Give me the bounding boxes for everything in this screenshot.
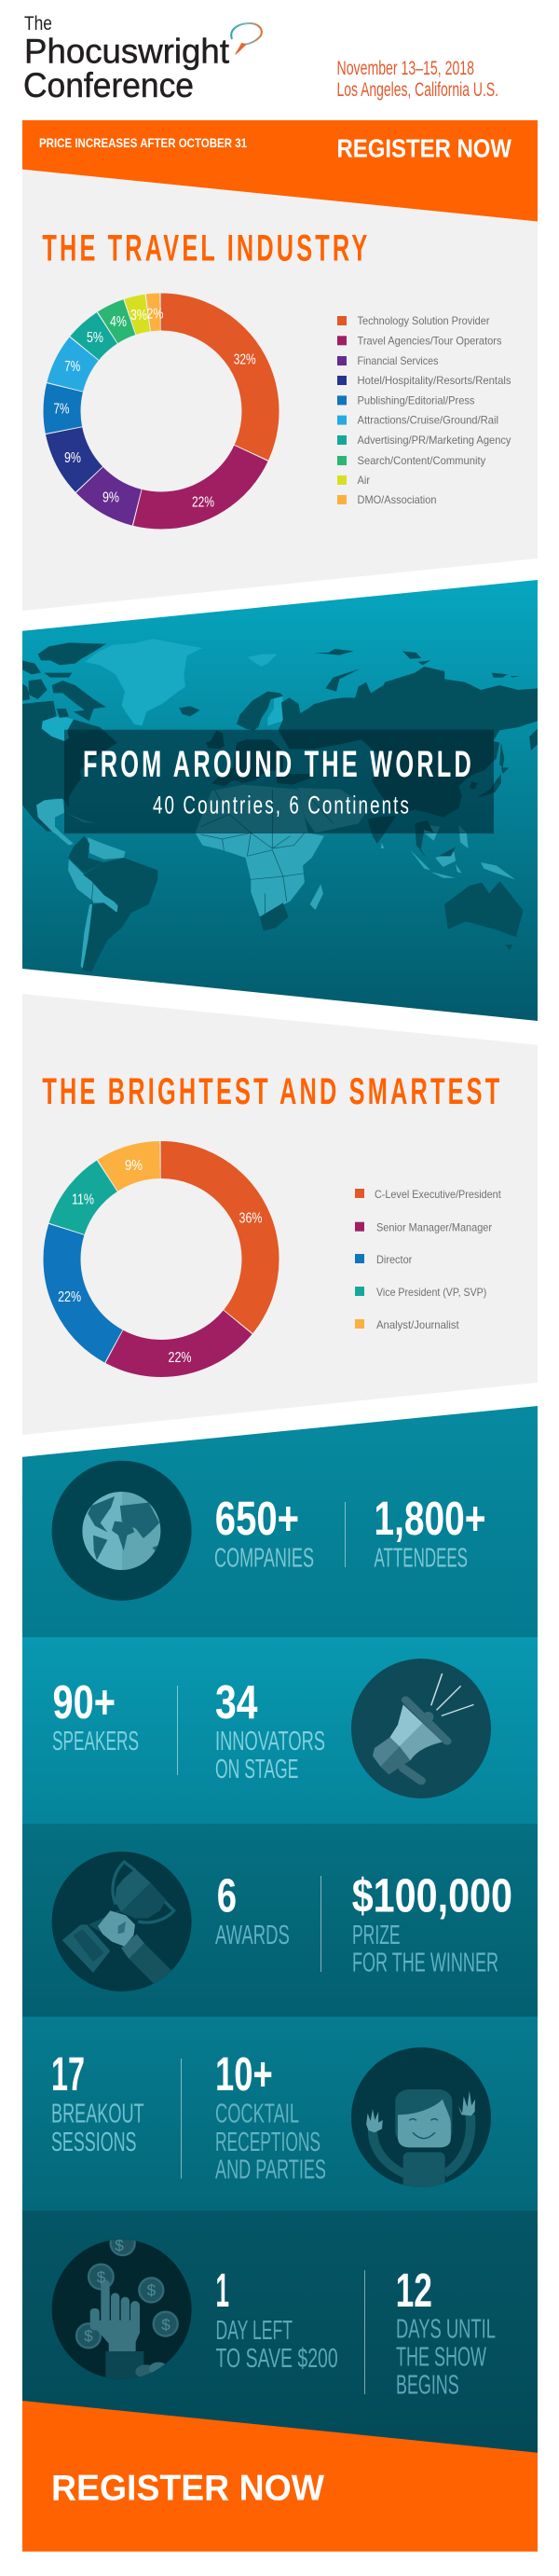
- event date and location: [337, 58, 498, 101]
- stat: 10+ cocktail receptions: RECEPTIONS: [215, 2128, 320, 2157]
- stat: $100,000 prize: $100,000: [352, 1869, 512, 1922]
- legend: travel industry: Technology Solution Provider: [358, 314, 490, 327]
- stat: 1 day left: 1: [216, 2264, 229, 2317]
- donut percentage labels: 11%: [72, 1192, 94, 1208]
- donut percentage labels: [54, 306, 256, 511]
- icon: hand and coins: $: [147, 2281, 157, 2299]
- logo: The Phocuswright Conference: Conference: [23, 66, 194, 104]
- chart: job level donut: [61, 1160, 261, 1358]
- stat: 1,800+ attendees: [375, 1492, 486, 1574]
- icon: hand and coins: $: [84, 2327, 93, 2345]
- legend: travel industry: Travel Agencies/Tour Operators: [358, 334, 501, 347]
- donut percentage labels: 5%: [87, 330, 103, 346]
- donut percentage labels: [58, 1158, 262, 1366]
- donut percentage labels: 22%: [168, 1350, 192, 1366]
- icon: trophy in hand: [52, 1852, 192, 1991]
- legend: travel industry: Hotel/Hospitality/Resorts/Rentals: [358, 374, 511, 387]
- legend: job level: Director: [376, 1253, 412, 1266]
- legend: travel industry: Financial Services: [358, 354, 438, 367]
- stat row: days left: [22, 2211, 538, 2455]
- panel: brightest and smartest: [22, 994, 538, 1435]
- stat row: awards and prize: [22, 1824, 538, 2017]
- subheading: countries and continents: 40 Countries, 6 Continents: [153, 792, 411, 820]
- footer banner: register now: [22, 2401, 538, 2552]
- world map: [22, 639, 538, 972]
- stat: 90+ speakers: 90+: [52, 1675, 116, 1729]
- legend: job level: Analyst/Journalist: [376, 1318, 459, 1331]
- legend: travel industry: Advertising/PR/Marketing Agency: [358, 434, 511, 447]
- title overlay box: [64, 730, 494, 833]
- stat row: companies and attendees: [22, 1406, 538, 1637]
- donut percentage labels: 9%: [102, 490, 119, 505]
- logo: The Phocuswright Conference: Phocuswright: [24, 32, 230, 70]
- stat: 12 days until the show: DAYS UNTIL: [396, 2314, 496, 2344]
- panel: travel industry: [22, 168, 538, 611]
- stat: 17 breakout sessions: SESSIONS: [51, 2128, 136, 2157]
- donut percentage labels: 32%: [234, 352, 256, 367]
- footer banner: register now: REGISTER NOW: [51, 2469, 324, 2509]
- legend: travel industry: Search/Content/Community: [358, 454, 485, 467]
- stat: 90+ speakers: SPEAKERS: [52, 1727, 139, 1756]
- logo: The Phocuswright Conference: [23, 12, 262, 104]
- top banner: register now: PRICE INCREASES AFTER OCTOBER 31: [39, 135, 247, 150]
- donut percentage labels: 3%: [130, 308, 147, 324]
- stat: 12 days until the show: 12: [396, 2264, 432, 2317]
- donut percentage labels: 2%: [147, 306, 164, 323]
- stat: 12 days until the show: [396, 2264, 496, 2400]
- stat: 12 days until the show: THE SHOW: [396, 2342, 486, 2372]
- logo: The Phocuswright Conference: The: [24, 12, 52, 34]
- event date and location: November 13–15, 2018: [337, 58, 474, 79]
- legend: travel industry: [337, 314, 511, 506]
- top banner: register now: [22, 120, 538, 222]
- heading: the travel industry: THE TRAVEL INDUSTRY: [42, 228, 370, 269]
- stat: 17 breakout sessions: [51, 2047, 144, 2157]
- donut percentage labels: 9%: [64, 450, 81, 466]
- stat: 1,800+ attendees: 1,800+: [375, 1492, 486, 1545]
- stat: 650+ companies: COMPANIES: [214, 1544, 314, 1574]
- stat: 17 breakout sessions: BREAKOUT: [51, 2100, 144, 2129]
- icon: hand and coins: $: [97, 2268, 106, 2286]
- legend: travel industry: DMO/Association: [358, 493, 436, 506]
- legend: job level: Vice President (VP, SVP): [376, 1286, 486, 1299]
- stat: 10+ cocktail receptions: AND PARTIES: [215, 2156, 326, 2185]
- stat: 6 awards: 6: [217, 1869, 237, 1922]
- donut percentage labels: 7%: [64, 359, 80, 375]
- icon: hand and coins: $: [115, 2237, 124, 2254]
- icon: smiling person: [351, 2047, 491, 2193]
- legend: job level: Senior Manager/Manager: [376, 1221, 492, 1234]
- stat: 1 day left: [216, 2264, 338, 2374]
- stat: 6 awards: [215, 1869, 290, 1950]
- donut percentage labels: 4%: [110, 314, 127, 330]
- stat: $100,000 prize: [352, 1869, 512, 1978]
- panel: world map: [22, 580, 538, 1021]
- stat: 10+ cocktail receptions: [215, 2047, 326, 2185]
- legend: travel industry: Publishing/Editorial/Press: [358, 393, 475, 406]
- stat: 650+ companies: [214, 1492, 314, 1574]
- donut percentage labels: 7%: [54, 401, 69, 418]
- stat: 1 day left: DAY LEFT: [216, 2316, 293, 2346]
- stat row: sessions and receptions: [22, 2017, 538, 2211]
- icon: hand and coins: [52, 2231, 192, 2381]
- chart: travel industry donut: [61, 311, 261, 511]
- stat: 12 days until the show: BEGINS: [396, 2370, 459, 2400]
- donut percentage labels: 22%: [58, 1289, 81, 1305]
- donut percentage labels: 36%: [239, 1211, 263, 1227]
- stat: 34 innovators on stage: 34: [215, 1675, 258, 1729]
- donut percentage labels: 9%: [125, 1158, 143, 1174]
- icon: megaphone: [351, 1659, 491, 1798]
- stat: 34 innovators on stage: ON STAGE: [215, 1755, 298, 1784]
- stat: $100,000 prize: PRIZE: [352, 1921, 401, 1950]
- stat: 1 day left: TO SAVE $200: [216, 2344, 338, 2374]
- stat row: speakers and innovators: [22, 1637, 538, 1824]
- stat: 1,800+ attendees: ATTENDEES: [375, 1544, 468, 1574]
- stat: 34 innovators on stage: INNOVATORS: [215, 1727, 325, 1756]
- legend: job level: C-Level Executive/President: [375, 1188, 501, 1201]
- icon: globe: [52, 1461, 192, 1601]
- stat: 90+ speakers: [52, 1675, 139, 1756]
- stat: 6 awards: AWARDS: [215, 1921, 290, 1950]
- stat: 10+ cocktail receptions: COCKTAIL: [215, 2100, 299, 2129]
- stat: 650+ companies: 650+: [215, 1492, 299, 1545]
- legend: travel industry: Attractions/Cruise/Ground/Rail: [358, 414, 498, 427]
- donut percentage labels: 22%: [192, 494, 214, 511]
- icon: hand and coins: $: [161, 2316, 170, 2334]
- legend: job level: [355, 1188, 501, 1331]
- top banner: register now: REGISTER NOW: [337, 134, 511, 163]
- stat: 17 breakout sessions: 17: [51, 2047, 85, 2101]
- stat: 34 innovators on stage: [215, 1675, 325, 1784]
- legend: travel industry: Air: [358, 474, 370, 487]
- stat: 10+ cocktail receptions: 10+: [215, 2047, 273, 2101]
